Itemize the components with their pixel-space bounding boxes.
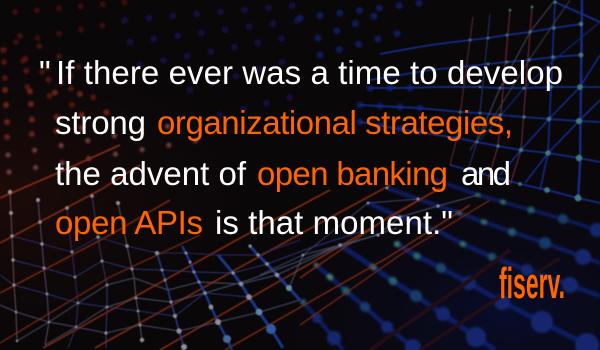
quote line 3: and bbox=[461, 155, 511, 192]
quote line 1: If there ever was a time to develop bbox=[56, 54, 563, 91]
quote line 4: is that moment." bbox=[215, 204, 453, 241]
quote line 3 bbox=[55, 155, 511, 192]
background mesh: dim dots upper left and centre bbox=[3, 2, 420, 172]
quote line 3: the advent of bbox=[55, 155, 247, 192]
mesh: upper right blue and red grid bbox=[360, 0, 600, 203]
quote line 4 bbox=[55, 204, 453, 241]
quote line 4: open APIs bbox=[55, 204, 203, 241]
mesh: centre orange diagonals bbox=[0, 145, 560, 350]
opening quotation mark: " bbox=[39, 54, 51, 91]
quote text bbox=[39, 54, 563, 241]
quote line 2: strong bbox=[55, 104, 146, 141]
mesh: lower right thick blue rows with large dots bbox=[300, 178, 600, 350]
mesh: lower left and centre node grid bbox=[0, 187, 478, 350]
quote line 3: open banking bbox=[257, 155, 448, 192]
quote line 2: organizational strategies, bbox=[157, 104, 513, 141]
